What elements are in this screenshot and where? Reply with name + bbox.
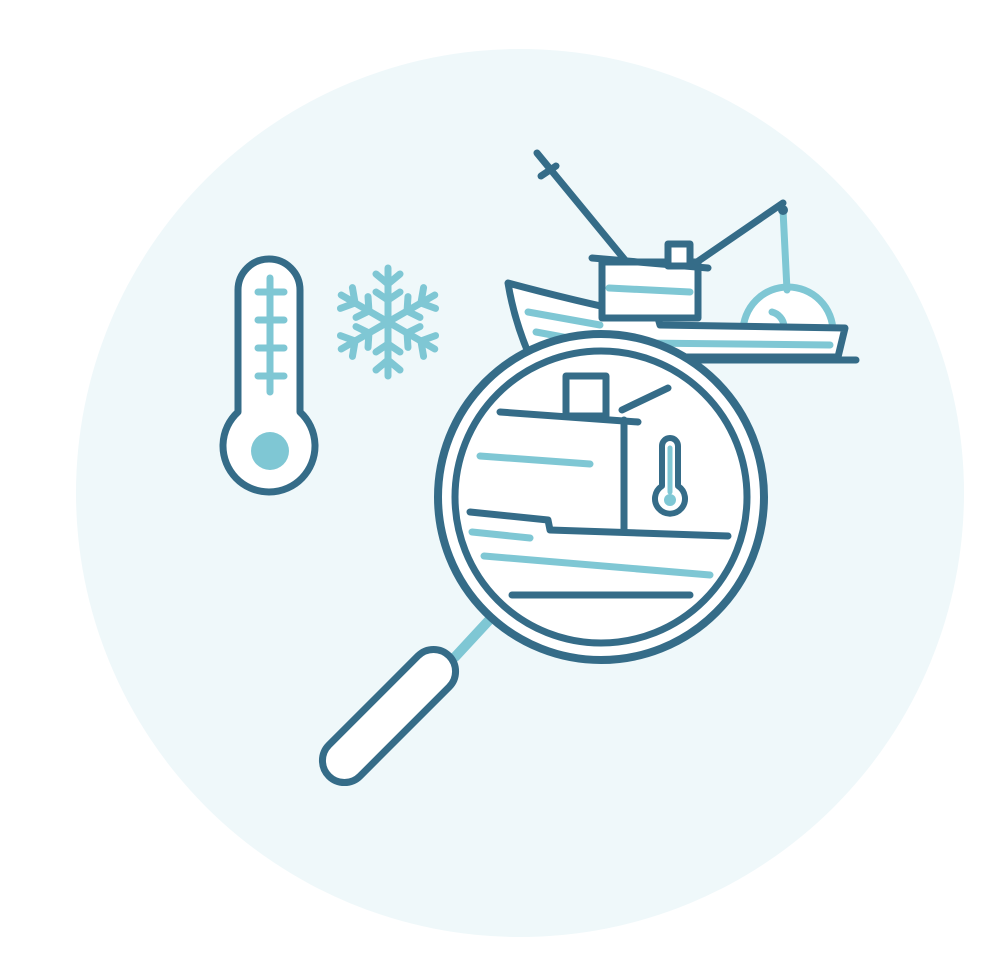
icon: magnifying glass (313, 334, 764, 792)
lens contents: zoomed boat (470, 376, 728, 595)
icon: thermometer (223, 259, 315, 492)
icon: fishing boat (508, 153, 856, 360)
icon: snowflake (335, 268, 441, 376)
